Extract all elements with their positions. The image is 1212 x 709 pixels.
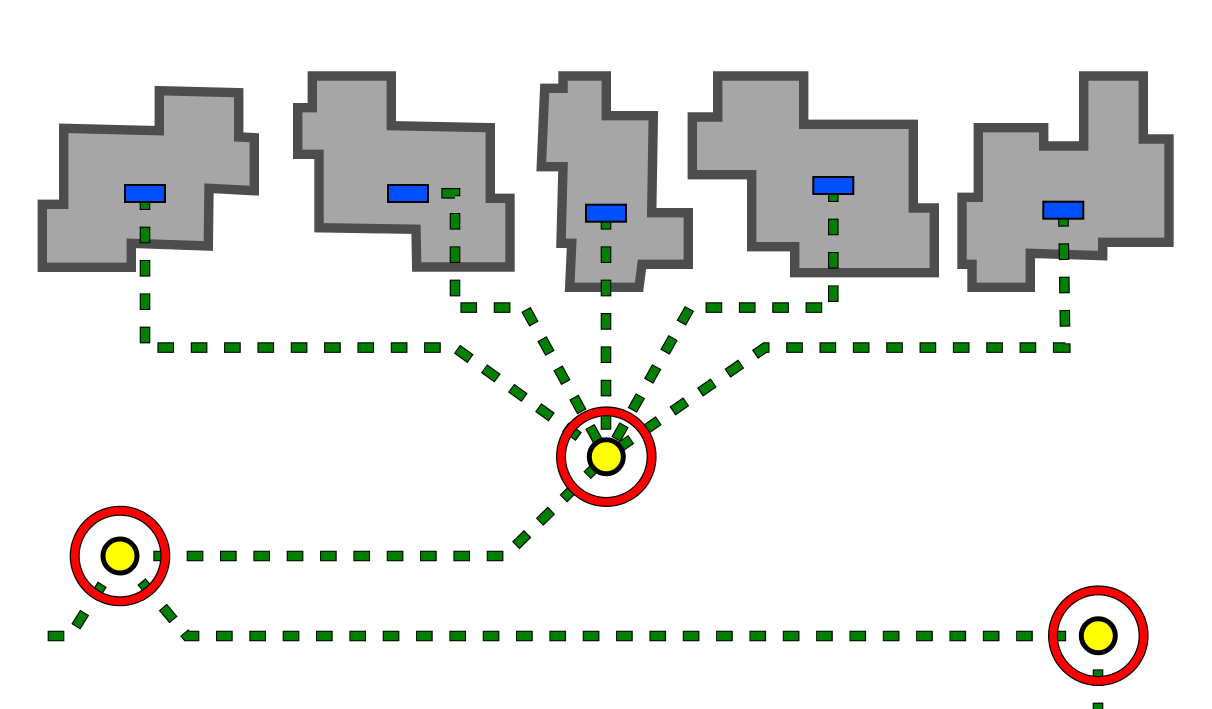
building 5	[962, 76, 1169, 287]
cable: building 4 to central hub	[606, 185, 833, 457]
cable: left hub to central hub	[120, 456, 606, 556]
cable: left hub to right hub	[120, 556, 1098, 636]
cable: building 2 to central hub	[408, 193, 606, 457]
cable: building 1 to central hub	[145, 193, 606, 457]
hub: left	[75, 511, 165, 601]
hub: right	[1053, 590, 1144, 681]
device: building 5	[1043, 202, 1083, 219]
building 3	[541, 76, 688, 287]
device: building 3	[586, 205, 626, 222]
device: building 1	[125, 185, 165, 202]
building 2	[298, 76, 510, 267]
cable: left hub to lower left	[47, 556, 120, 636]
cable: right hub downward	[1093, 636, 1103, 709]
cable: building 3 to central hub	[601, 213, 611, 456]
device: building 2	[388, 185, 428, 202]
building 4	[692, 76, 934, 273]
device: building 4	[813, 177, 853, 194]
hub: central	[561, 411, 652, 502]
cable: building 5 to central hub	[606, 210, 1065, 456]
building 1	[42, 91, 254, 267]
